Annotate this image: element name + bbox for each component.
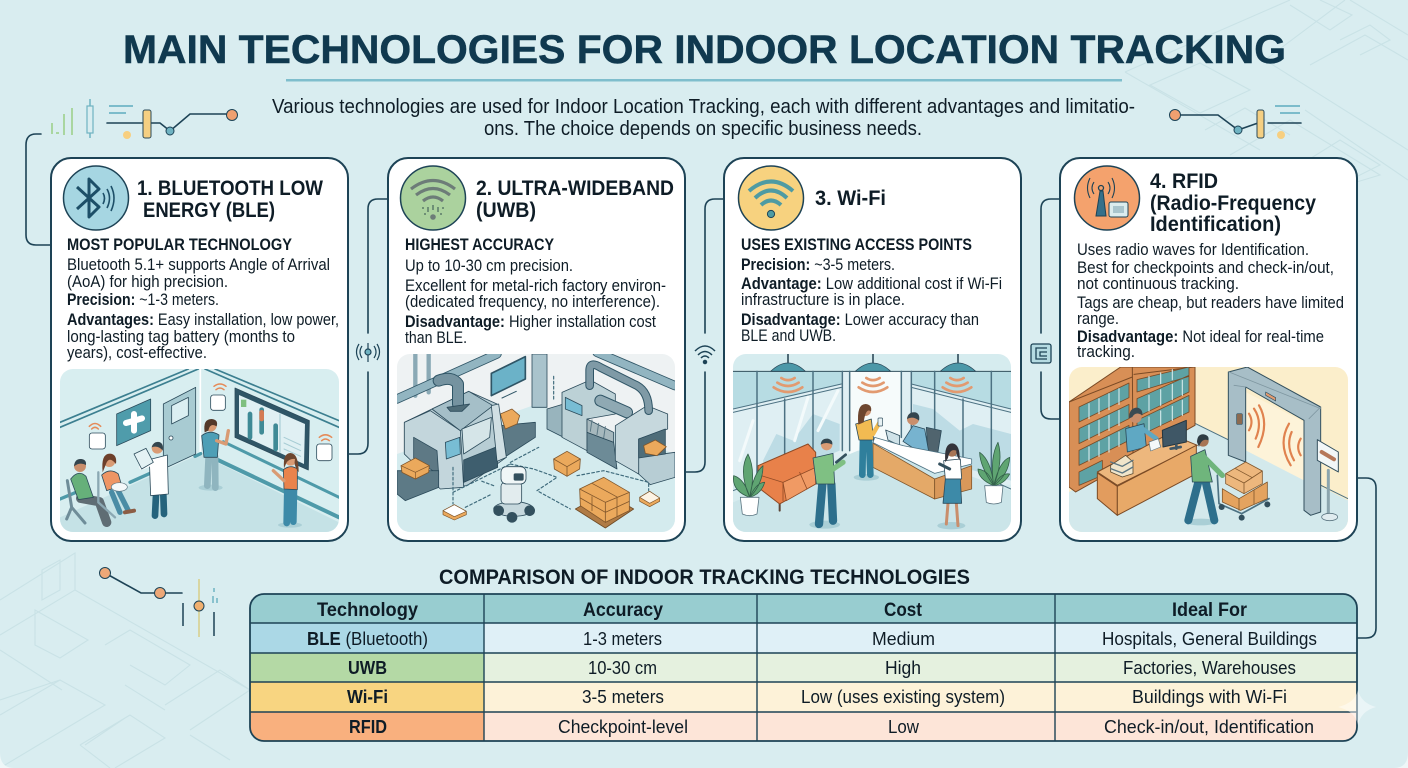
panel: Wi-Fi [724,158,1021,541]
table fills [250,594,1357,741]
body text [405,235,666,347]
table row: RFID [349,716,1314,737]
heading [476,176,674,222]
computer monitor [1162,420,1186,447]
illustration: hospital corridor [60,369,339,532]
connector: BLE card to UWB card lower [349,372,368,454]
body text: range. [1077,309,1119,328]
connector: header to BLE card [26,134,51,245]
body text: (dedicated frequency, no interference). [405,292,660,311]
body text: than BLE. [405,328,467,347]
table row: UWB: UWB [348,657,387,678]
heading: 3. Wi-Fi [815,186,886,210]
wall monitor [491,357,525,396]
body text: BLE and UWB. [741,326,836,345]
panel: Bluetooth Low Energy [51,158,348,541]
heading: 1. BLUETOOTH LOW [137,176,324,200]
doctor [155,495,164,516]
decoration: bottom left signal motif [100,568,217,637]
gate [1246,392,1304,480]
table header row: Technology [317,600,418,621]
icon: RFID antenna and reader [1074,166,1140,230]
table row: UWB: Factories, Warehouses [1123,657,1296,678]
heading: (Radio-Frequency [1150,191,1316,215]
table row: RFID: Check-in/out, Identification [1104,716,1314,737]
body text: Excellent for metal-rich factory environ- [405,276,666,295]
body text [67,235,339,362]
connector: RFID card to table [1357,478,1376,638]
info sign [1324,470,1333,514]
standing woman in yellow [854,474,879,481]
title: MAIN TECHNOLOGIES FOR INDOOR LOCATION TRACKING [123,28,1286,72]
floor plan watermark: bottom left [0,553,250,768]
body text: Bluetooth 5.1+ supports Angle of Arrival [67,255,330,274]
table header row: Cost [884,600,923,621]
heading: (UWB) [476,198,536,222]
connector: Wi-Fi card to RFID card lower [1041,372,1060,419]
body text [741,235,1002,345]
body text: Advantage: Low additional cost if Wi-Fi [741,274,1002,293]
body text: USES EXISTING ACCESS POINTS [741,235,972,254]
left plant [733,454,765,497]
table row: Wi-Fi: Wi-Fi [347,686,388,707]
sofa [778,504,781,512]
icon: UWB signal [400,166,466,230]
single box [554,451,580,476]
display screen [235,388,309,470]
panel: Ultra-Wideband [388,158,685,541]
body text: Precision: ~1-3 meters. [67,290,219,309]
table row: Wi-Fi: Buildings with Wi-Fi [1132,686,1287,707]
table row: RFID: Checkpoint-level [558,716,688,737]
table row: BLE: Hospitals, General Buildings [1102,628,1317,649]
counter [1097,434,1197,485]
connector: UWB card to Wi-Fi card upper [705,199,724,333]
table row: RFID: RFID [349,716,387,737]
body text: Advantages: Easy installation, low power, [67,310,339,329]
body text: tracking. [1077,342,1135,361]
intro text [272,96,1135,140]
icon: small antenna signal [356,343,380,362]
floor plan watermark: top right [1125,0,1408,190]
corner accents [0,752,1408,768]
medical sign [117,399,151,446]
bookshelf [1069,367,1195,492]
staff in teal [199,485,223,491]
table row: BLE: BLE (Bluetooth) [307,628,428,649]
body text: infrastructure is in place. [741,290,905,309]
icon: wifi [738,166,804,230]
connector: UWB card to Wi-Fi card lower [686,372,705,472]
body text: long-lasting tag battery (months to [67,327,295,346]
body text: Disadvantage: Not ideal for real-time [1077,327,1324,346]
table row: Wi-Fi [347,686,1287,707]
seated patients [67,481,85,523]
body text: MOST POPULAR TECHNOLOGY [67,235,293,254]
clerk [1126,424,1146,452]
body text: Disadvantage: Lower accuracy than [741,310,979,329]
table row: UWB: 10-30 cm [588,657,657,678]
intro text: ons. The choice depends on specific business needs. [484,118,922,140]
body text: Uses radio waves for Identification. [1077,240,1309,259]
body text: not continuous tracking. [1077,274,1239,293]
body text: (AoA) for high precision. [67,272,228,291]
illustration: factory [397,352,675,532]
heading: 4. RFID [1150,169,1218,193]
body text: HIGHEST ACCURACY [405,235,555,254]
book stack [1111,455,1133,477]
heading: ENERGY (BLE) [143,198,275,222]
table row: BLE: Medium [872,628,935,649]
connector: Wi-Fi card to RFID card upper [1041,199,1060,333]
table header row [317,600,1248,621]
right machine [547,404,564,437]
table row: Wi-Fi: Low (uses existing system) [801,686,1005,707]
comparison table [250,594,1357,741]
wall beacons [89,433,105,449]
heading [137,176,324,222]
dashed routes [453,374,649,509]
body text: Tags are cheap, but readers have limited [1077,293,1344,312]
pallet [574,506,634,528]
title underline [286,79,1122,82]
decoration: top right signal motif [1170,106,1301,139]
table header row: Ideal For [1172,600,1248,621]
ceiling lamps [788,354,958,362]
laptop paper [1149,439,1161,451]
body text: years), cost-effective. [67,343,207,362]
woman in white and blue skirt [937,522,965,529]
panel: RFID [1060,158,1357,541]
floor anchors [443,505,466,520]
table row: Wi-Fi: 3-5 meters [582,686,664,707]
illustration: office lobby [733,354,1011,532]
body text: Precision: ~3-5 meters. [741,255,895,274]
visitor in orange [278,522,302,528]
body text: Up to 10-30 cm precision. [405,256,573,275]
heading [1150,169,1316,236]
wifi signal arcs [774,378,971,392]
decoration: top left signal motif [52,99,238,139]
heading: Identification) [1150,212,1281,236]
body text: Best for checkpoints and check-in/out, [1077,258,1334,277]
left machine [499,422,535,456]
sparkle watermark [1338,690,1376,725]
reception desk [926,427,941,458]
table header row: Accuracy [583,600,663,621]
intro text: Various technologies are used for Indoor Location Tracking, each with different advantages and limitatio- [272,96,1135,118]
table row: UWB: High [885,657,921,678]
customer with cart [1185,519,1217,525]
table row: RFID: Low [888,716,920,737]
illustration: library checkout gate [1069,367,1348,532]
icon: small RFID tag [1031,344,1051,363]
table heading: COMPARISON OF INDOOR TRACKING TECHNOLOGIES [439,566,970,589]
table row: BLE: 1-3 meters [583,628,662,649]
body text: Disadvantage: Higher installation cost [405,312,656,331]
icon: bluetooth [64,166,128,230]
robot [494,502,534,516]
icon: small wifi [695,346,715,364]
door [163,387,196,469]
man in green [809,521,840,529]
table row: UWB [348,657,1296,678]
right plant [978,442,1010,486]
table row: BLE [307,628,1317,649]
body text [1077,240,1344,361]
connector: BLE card to UWB card upper [368,199,388,333]
heading: 2. ULTRA-WIDEBAND [476,176,674,200]
